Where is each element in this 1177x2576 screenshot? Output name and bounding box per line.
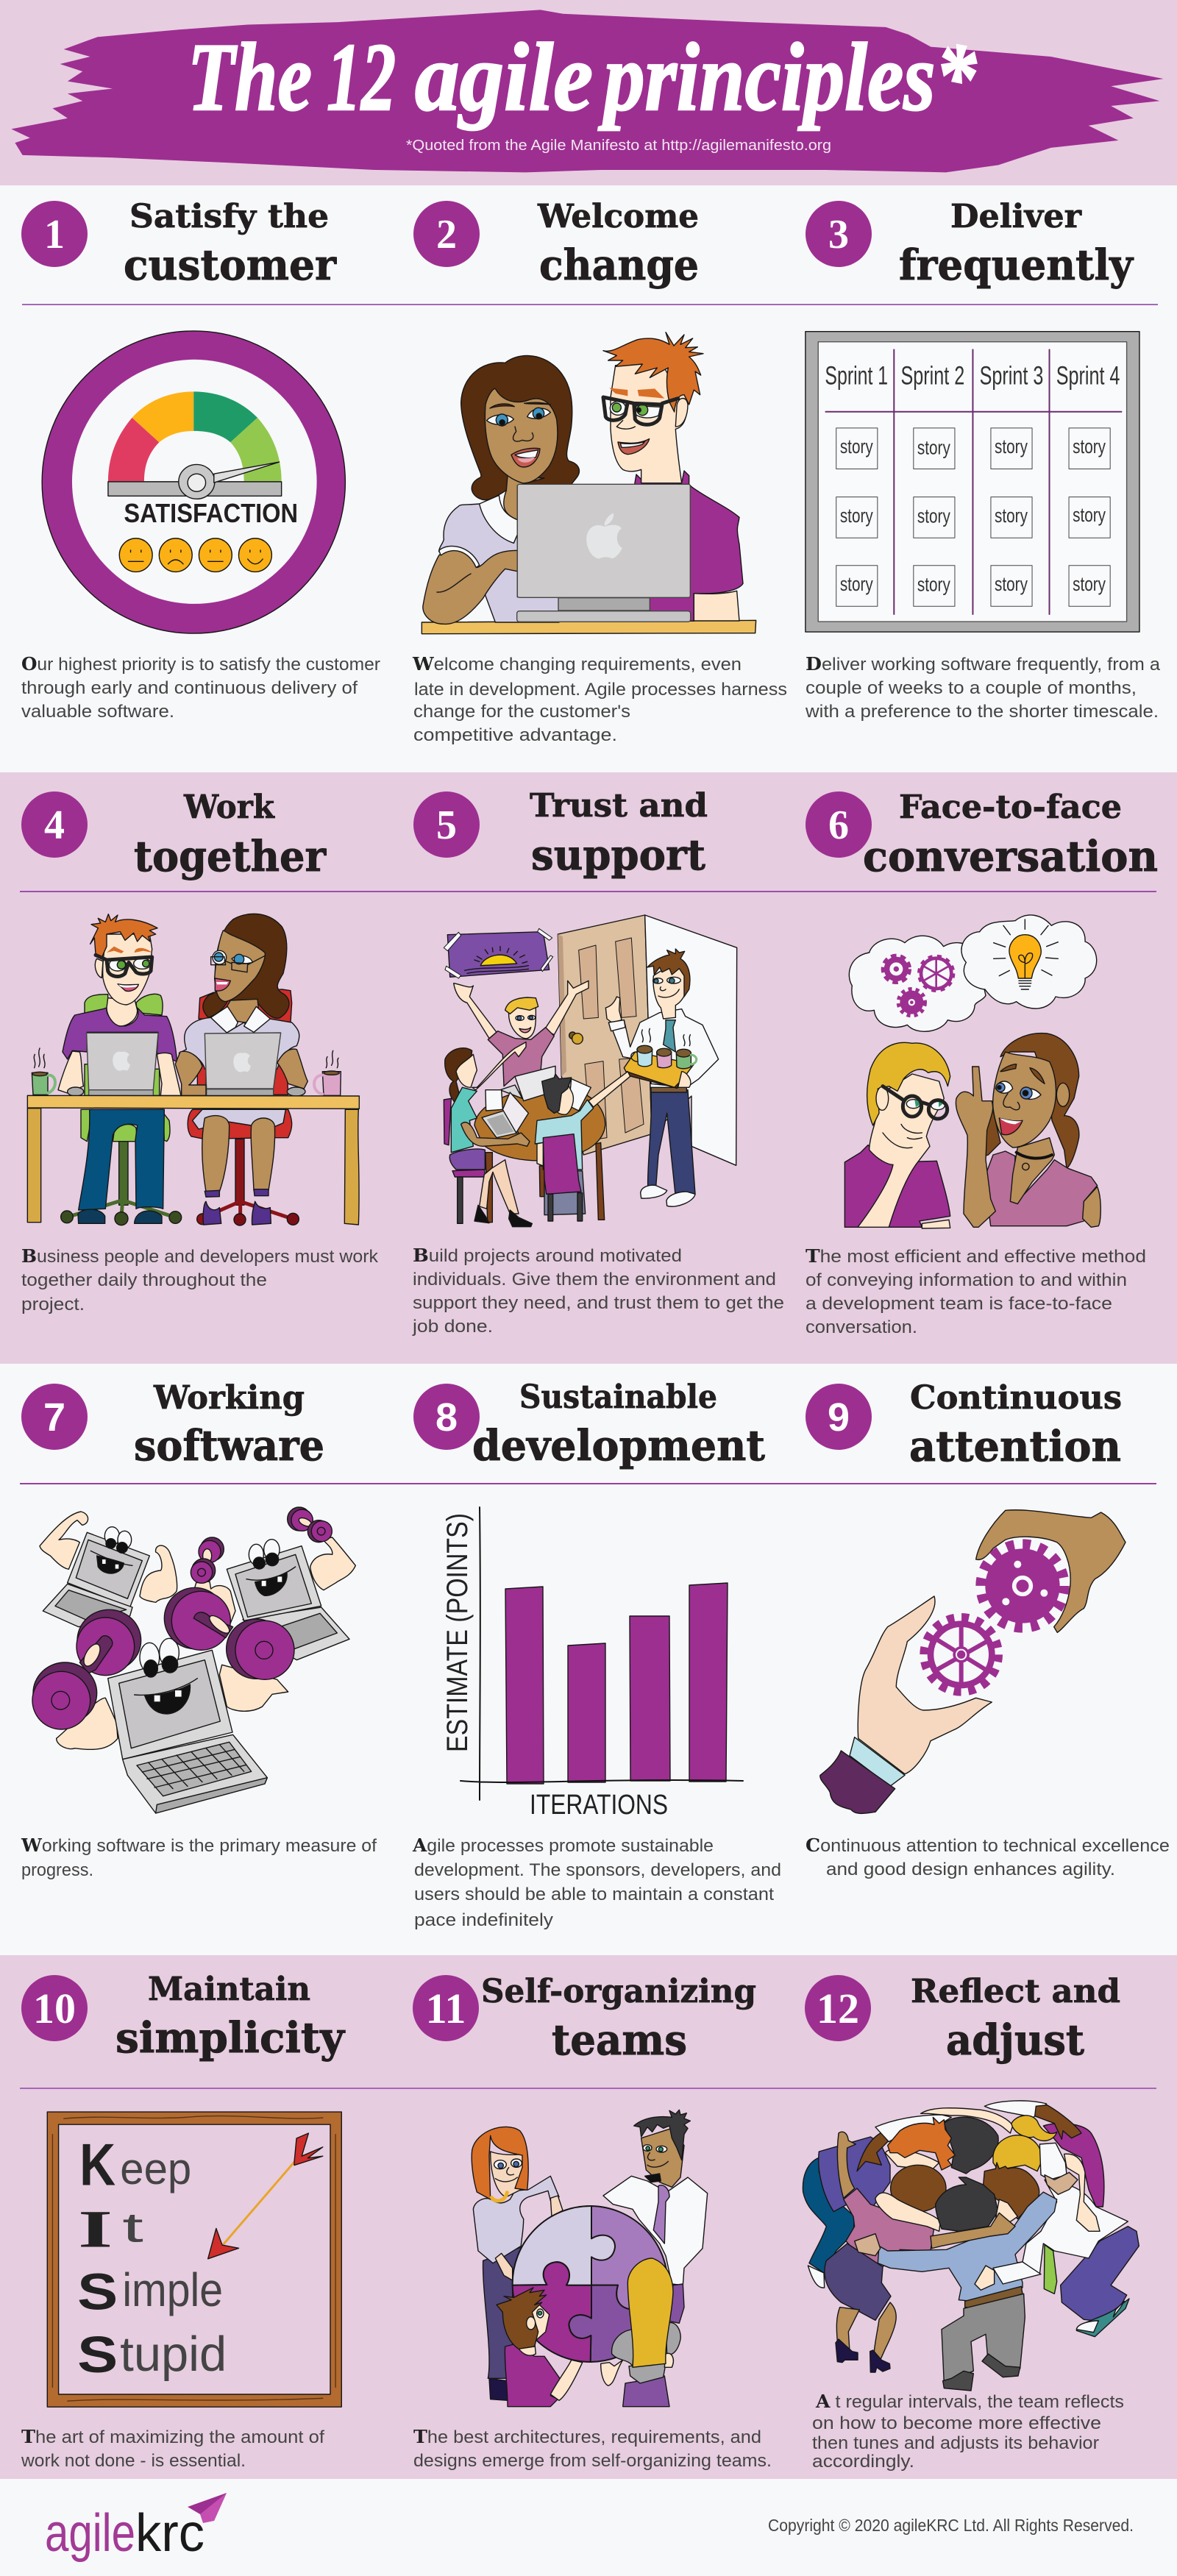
logo: agilekrc: krc — [135, 2504, 205, 2563]
panel: principle 3 — [805, 198, 1161, 722]
heading 11 — [481, 1973, 756, 2065]
number badge 9: 9 — [828, 1395, 850, 1440]
body text 5: individuals. Give them the environment and — [413, 1270, 776, 1289]
icon: sprint board: story — [840, 505, 873, 527]
panel: principle 6 — [806, 789, 1158, 1337]
thought cloud: lightbulb — [961, 915, 1097, 1008]
number badge 7 — [21, 1384, 88, 1450]
illustration: KISS framed sign: S — [77, 2263, 118, 2321]
illustration: team holding puzzle — [472, 2110, 708, 2407]
title: The — [188, 23, 312, 131]
body text 2: competitive advantage. — [413, 725, 617, 745]
number badge 1 — [21, 201, 88, 267]
title: agile — [415, 23, 593, 131]
heading 10: Maintain — [148, 1971, 310, 2008]
panel: principle 5 — [412, 787, 784, 1337]
number badge 12: 12 — [817, 1985, 859, 2032]
icon: sprint board: Sprint 2 — [900, 360, 964, 390]
number badge 3: 3 — [828, 212, 849, 257]
gear: solid — [981, 1544, 1064, 1628]
icon: sprint board: story — [995, 505, 1028, 527]
logo: agilekrc — [45, 2493, 227, 2563]
bar chart: estimate vs iterations — [441, 1507, 743, 1821]
body text 2: Welcome changing requirements, even — [412, 653, 742, 675]
icon: sprint board — [806, 332, 1139, 632]
heading 10 — [115, 1971, 346, 2063]
body text 8 — [412, 1835, 781, 1930]
body text 4: project. — [21, 1295, 85, 1314]
heading 1: customer — [124, 241, 337, 290]
body text 1: valuable software. — [21, 702, 174, 722]
body text 5: job done. — [412, 1317, 493, 1337]
heading 7: Working — [153, 1379, 305, 1417]
heading 3: frequently — [899, 241, 1134, 290]
icon: sprint board: story — [1073, 505, 1106, 526]
panel: principle 4 — [21, 789, 379, 1314]
icon: sprint board: story — [917, 437, 950, 459]
number badge 6 — [806, 791, 872, 858]
title: principles* — [598, 23, 977, 131]
panel: principle 2 — [412, 198, 787, 745]
body text 4: Business people and developers must work — [21, 1245, 379, 1267]
illustration: KISS framed sign: t — [122, 2205, 143, 2251]
body text 3: with a preference to the shorter timescale. — [805, 702, 1159, 722]
heading 6: conversation — [863, 832, 1158, 881]
title — [188, 23, 977, 131]
body text 6: of conveying information to and within — [806, 1270, 1127, 1290]
body text 3: couple of weeks to a couple of months, — [806, 678, 1137, 698]
body text 5 — [412, 1245, 784, 1337]
heading 12 — [911, 1973, 1120, 2065]
illustration: team huddle — [803, 2101, 1139, 2391]
puzzle — [513, 2206, 668, 2362]
body text 8: pace indefinitely — [414, 1910, 553, 1930]
body text 1: through early and continuous delivery of — [21, 678, 358, 698]
icon: sprint board: Sprint 3 — [980, 360, 1043, 390]
body text 11 — [413, 2426, 772, 2471]
body text 3: Deliver working software frequently, from a — [806, 653, 1161, 675]
body text 12: A t regular intervals, the team reflects — [815, 2391, 1124, 2412]
heading 5: Trust and — [530, 787, 708, 825]
icon: sprint board: story — [1073, 574, 1106, 595]
thought cloud: gears — [849, 936, 986, 1031]
title: 12 — [327, 23, 396, 131]
talking woman — [956, 1033, 1100, 1227]
icon: sprint board: story — [840, 574, 873, 595]
body text 9: and good design enhances agility. — [826, 1860, 1115, 1879]
number badge 9 — [806, 1384, 872, 1450]
body text 10: The art of maximizing the amount of — [21, 2426, 324, 2447]
heading 8: development — [472, 1421, 766, 1470]
heading 9: Continuous — [910, 1379, 1122, 1417]
illustration: KISS framed sign: I — [78, 2199, 113, 2259]
body text 10: work not done - is essential. — [21, 2451, 246, 2471]
panel: principle 10 — [21, 1971, 346, 2471]
icon: sprint board: Sprint 1 — [825, 360, 888, 390]
number badge 10: 10 — [33, 1985, 76, 2032]
body text 4: together daily throughout the — [21, 1270, 267, 1290]
panel: principle 9 — [806, 1379, 1170, 1879]
body text 11: The best architectures, requirements, and — [413, 2426, 761, 2447]
number badge 2: 2 — [436, 212, 457, 257]
number badge 2 — [413, 201, 480, 267]
body text 6: conversation. — [806, 1317, 917, 1337]
y axis label: ESTIMATE (POINTS) — [441, 1513, 474, 1752]
number badge 10 — [21, 1975, 88, 2041]
heading 7 — [134, 1379, 324, 1470]
number badge 3 — [806, 201, 872, 267]
number badge 6: 6 — [828, 803, 849, 848]
body text 8: development. The sponsors, developers, and — [414, 1860, 781, 1880]
body text 5: support they need, and trust them to get the — [413, 1293, 784, 1313]
x axis label: ITERATIONS — [530, 1790, 668, 1821]
brush stroke behind title — [11, 10, 1164, 172]
heading 4 — [134, 789, 327, 881]
copyright: Copyright © 2020 agileKRC Ltd. All Rights Reserved. — [768, 2516, 1134, 2535]
laptop front — [57, 1638, 288, 1813]
panel: row 4 background — [0, 1955, 1177, 2479]
number badge 11 — [413, 1975, 479, 2041]
heading 9: attention — [909, 1422, 1121, 1471]
number badge 1: 1 — [44, 212, 65, 257]
number badge 5: 5 — [436, 803, 457, 848]
icon: satisfaction gauge: SATISFACTION — [124, 498, 298, 528]
icon: sprint board: story — [917, 505, 950, 527]
icon: sprint board: story — [1073, 436, 1106, 458]
number badge 12 — [805, 1975, 871, 2041]
illustration: KISS framed sign: tupid — [120, 2326, 227, 2381]
panel: principle 12 — [803, 1973, 1139, 2472]
body text 9: Continuous attention to technical excellence — [806, 1835, 1170, 1856]
gear: spoked — [924, 1618, 998, 1692]
panel: header band — [0, 0, 1177, 185]
illustration: KISS framed sign: imple — [122, 2263, 223, 2316]
icon: sprint board: story — [995, 574, 1028, 595]
laptop back left — [40, 1512, 177, 1627]
heading 12: Reflect and — [911, 1973, 1120, 2010]
illustration: KISS framed sign: K — [79, 2131, 115, 2198]
heading 8 — [472, 1378, 766, 1470]
illustration: KISS framed sign — [47, 2112, 341, 2407]
illustration: KISS framed sign: eep — [120, 2144, 191, 2193]
panel: principle 7 — [21, 1379, 377, 1880]
body text 6: a development team is face-to-face — [806, 1294, 1112, 1314]
heading 9 — [909, 1379, 1122, 1471]
body text 1: Our highest priority is to satisfy the customer — [21, 653, 380, 675]
heading 2: Welcome — [537, 198, 699, 235]
body text 9 — [806, 1835, 1170, 1879]
body text 12 — [812, 2391, 1124, 2472]
body text 8: Agile processes promote sustainable — [412, 1835, 714, 1856]
illustration: working together at desk — [27, 914, 359, 1225]
body text 2: late in development. Agile processes harness — [414, 680, 787, 700]
body text 10 — [21, 2426, 324, 2471]
heading 10: simplicity — [115, 2013, 346, 2063]
dumbbells — [32, 1507, 332, 1729]
heading 2: change — [539, 241, 699, 290]
heading 2 — [537, 198, 699, 290]
number badge 5 — [413, 791, 480, 858]
heading 4: together — [134, 832, 327, 881]
heading 11: Self-organizing — [481, 1973, 756, 2010]
illustration: face to face conversation — [844, 915, 1100, 1228]
heading 12: adjust — [946, 2015, 1085, 2065]
illustration: KISS framed sign: S — [77, 2326, 118, 2383]
body text 7: progress. — [21, 1860, 93, 1880]
thinking man — [844, 1042, 950, 1228]
body text 7 — [21, 1835, 377, 1880]
illustration: team with door, coffee and table — [444, 915, 737, 1227]
heading 3 — [899, 198, 1134, 290]
body text 11: designs emerge from self-organizing teams. — [413, 2451, 772, 2471]
panel: footer — [45, 2493, 1134, 2563]
heading 11: teams — [552, 2015, 687, 2065]
body text 1 — [21, 653, 380, 722]
body text 12: accordingly. — [812, 2452, 914, 2472]
logo: agilekrc: agile — [45, 2504, 135, 2563]
laptop back right — [193, 1537, 355, 1660]
body text 12: on how to become more effective — [812, 2413, 1101, 2433]
body text 2 — [412, 653, 787, 745]
heading 6: Face-to-face — [899, 789, 1122, 826]
number badge 8 — [413, 1384, 480, 1450]
panel: principle 8 — [412, 1378, 781, 1930]
icon: arrow — [208, 2133, 323, 2259]
number badge 7: 7 — [43, 1395, 65, 1440]
heading 8: Sustainable — [519, 1378, 717, 1416]
icon: sprint board: story — [917, 574, 950, 596]
illustration: couple at laptop — [422, 332, 756, 634]
body text 6: The most efficient and effective method — [806, 1245, 1146, 1267]
body text 2: change for the customer's — [413, 702, 630, 722]
icon: satisfaction gauge — [42, 331, 345, 633]
heading 6 — [863, 789, 1158, 881]
number badge 4: 4 — [44, 803, 65, 848]
heading 3: Deliver — [950, 198, 1082, 235]
heading 7: software — [134, 1421, 324, 1470]
heading 4: Work — [183, 789, 275, 826]
body text 3 — [805, 653, 1161, 722]
number badge 11: 11 — [426, 1985, 466, 2032]
heading 5: support — [531, 830, 706, 880]
body text 6 — [806, 1245, 1146, 1337]
icon: sprint board: story — [840, 436, 873, 458]
number badge 4 — [21, 791, 88, 858]
icon: sprint board: story — [995, 436, 1028, 458]
body text 8: users should be able to maintain a constant — [414, 1885, 774, 1904]
body text 7: Working software is the primary measure of — [21, 1835, 377, 1856]
illustration: hands fitting gears — [820, 1510, 1126, 1813]
panel: principle 11 — [413, 1973, 772, 2471]
panel: row 2 background — [0, 772, 1177, 1364]
heading 1: Satisfy the — [129, 198, 329, 235]
body text 4 — [21, 1245, 379, 1314]
heading 5 — [530, 787, 708, 880]
illustration: laptops lifting weights — [32, 1507, 355, 1813]
number badge 8: 8 — [435, 1395, 458, 1440]
panel: principle 1 — [21, 198, 380, 722]
body text 12: then tunes and adjusts its behavior — [812, 2433, 1099, 2453]
heading 1 — [124, 198, 337, 290]
body text 5: Build projects around motivated — [413, 1245, 682, 1266]
source note: *Quoted from the Agile Manifesto at http://agilemanifesto.org — [406, 138, 831, 154]
